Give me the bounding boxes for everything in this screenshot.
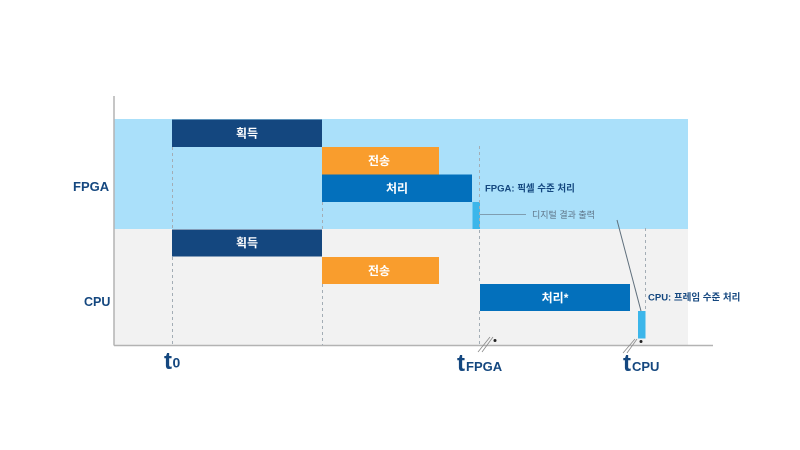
digital output leader line [480, 214, 526, 216]
tCPU time label: t [623, 350, 631, 377]
FPGA acquisition bar: 획득 [236, 126, 258, 140]
CPU digital output block [638, 311, 646, 338]
note marker: tFPGA [494, 339, 496, 342]
CPU acquisition bar: 획득 [236, 236, 258, 250]
CPU row label: CPU [84, 295, 110, 309]
FPGA transfer bar: 전송 [368, 154, 390, 168]
tFPGA time label: FPGA [466, 359, 503, 374]
FPGA digital output block [472, 202, 480, 229]
FPGA processing bar [322, 174, 472, 202]
guide lines [172, 146, 646, 345]
CPU output leader line [617, 220, 641, 311]
CPU processing bar [480, 284, 630, 311]
digital output label: 디지털 결과 출력 [532, 209, 595, 220]
panel: FPGA lane background [114, 119, 688, 229]
tCPU time label [623, 350, 659, 377]
FPGA row label: FPGA [73, 179, 110, 194]
tFPGA time label [457, 350, 503, 377]
panel: CPU lane background [114, 229, 688, 345]
CPU processing bar: 처리* [542, 291, 569, 305]
CPU transfer bar: 전송 [368, 264, 390, 278]
t0 time label: 0 [172, 354, 180, 370]
FPGA acquisition bar [172, 120, 322, 147]
FPGA processing bar: 처리 [386, 182, 408, 196]
tCPU time label: CPU [632, 359, 659, 374]
CPU transfer bar [322, 257, 439, 284]
FPGA transfer bar [322, 147, 439, 174]
axes [114, 96, 713, 346]
CPU acquisition bar [172, 230, 322, 256]
FPGA callout: FPGA: 픽셀 수준 처리 [485, 182, 575, 194]
CPU callout: CPU: 프레임 수준 처리 [648, 292, 740, 304]
t0 time label [164, 348, 180, 375]
axis break: tCPU [623, 339, 637, 353]
tFPGA time label: t [457, 350, 465, 377]
axis break: tFPGA [478, 337, 493, 352]
note marker: tCPU [640, 340, 642, 343]
t0 time label: t [164, 348, 172, 375]
